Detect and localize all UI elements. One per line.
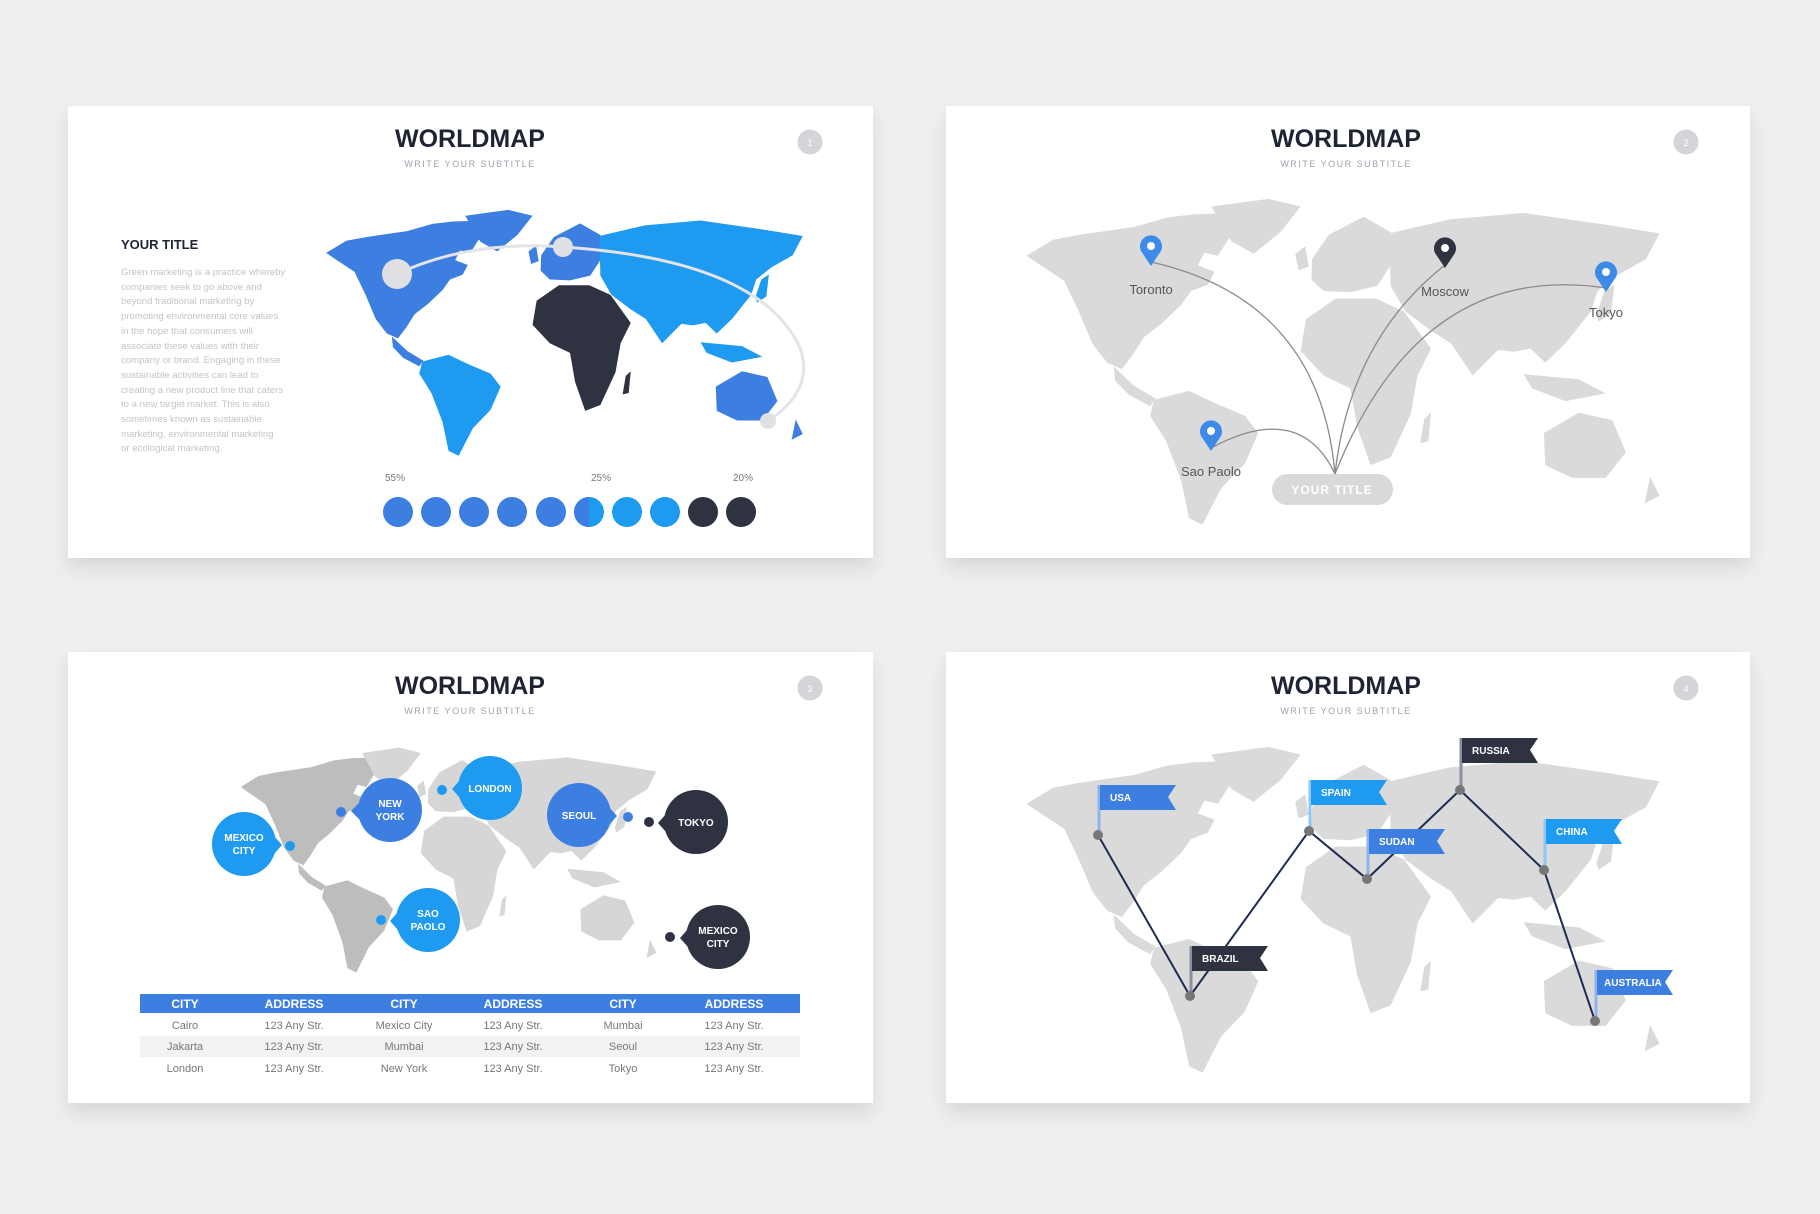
bubble: London: [437, 756, 522, 820]
map gray: [1026, 747, 1659, 1073]
route line: [1098, 790, 1595, 1021]
percentage labels: 55%: [385, 473, 405, 484]
badge 1: 1: [807, 138, 813, 148]
text block: your title: sustainable activities can lead to: [121, 370, 259, 381]
pill: your title: YOUR TITLE: [1291, 483, 1373, 497]
bubble: Mexico City dark: CITY: [707, 939, 730, 950]
flag: Spain: [1304, 780, 1387, 836]
bubble: New York: [336, 778, 422, 842]
bubble: New York: YORK: [376, 812, 405, 823]
table: CITY: [390, 997, 418, 1011]
pin: Moscow: Moscow: [1421, 284, 1469, 299]
badge 4: [1674, 676, 1698, 700]
arc connecting markers: [382, 237, 804, 429]
flag: Brazil: BRAZIL: [1202, 954, 1239, 965]
heading 3: [395, 672, 545, 716]
table: New York: [381, 1063, 428, 1075]
table: 123 Any Str.: [483, 1063, 543, 1075]
bubble: New York: NEW: [378, 799, 402, 810]
map: colored continents: [326, 210, 803, 456]
flag: China: CHINA: [1556, 827, 1588, 838]
text block: your title: marketing, environmental marketing: [121, 429, 274, 440]
text block: your title: in the hope that consumers will: [121, 326, 253, 337]
bubble: London: LONDON: [468, 784, 512, 795]
flags: [1093, 738, 1673, 1026]
bubble: Sao Paolo: SAO: [417, 909, 439, 920]
flag: USA: [1093, 785, 1176, 840]
flag: Brazil: [1185, 946, 1268, 1001]
panel 2: pins map: [946, 106, 1750, 558]
percentage labels: 25%: [591, 473, 611, 484]
bubble: Mexico City: [212, 812, 295, 876]
heading 2: WORLDMAP: [1271, 125, 1421, 153]
heading 4: WRITE YOUR SUBTITLE: [1280, 706, 1412, 716]
bubble: Mexico City dark: [665, 905, 750, 969]
bubble: Seoul: [547, 783, 633, 847]
badge 1: [798, 130, 822, 154]
table: CITY: [171, 997, 199, 1011]
table: 123 Any Str.: [264, 1063, 324, 1075]
heading 2: WRITE YOUR SUBTITLE: [1280, 159, 1412, 169]
badge 3: 3: [807, 684, 813, 694]
pin: Toronto: Toronto: [1129, 282, 1173, 297]
percentage labels: 20%: [733, 473, 753, 484]
map gray with darker americas: [241, 748, 656, 973]
table: 123 Any Str.: [704, 1063, 764, 1075]
table: ADDRESS: [705, 997, 763, 1011]
table: Mumbai: [603, 1020, 643, 1032]
text block: your title: promoting environmental core values: [121, 311, 279, 322]
bubble: Mexico City dark: MEXICO: [698, 926, 738, 937]
flag: Australia: AUSTRALIA: [1604, 978, 1662, 989]
table: CITY: [609, 997, 637, 1011]
badge 4: 4: [1683, 684, 1689, 694]
flag: Russia: [1455, 738, 1538, 795]
table: Jakarta: [167, 1041, 204, 1053]
flag: Spain: SPAIN: [1321, 788, 1351, 799]
badge 3: [798, 676, 822, 700]
text block: your title: companies seek to go above and: [121, 282, 262, 293]
heading 4: [1271, 672, 1421, 716]
connecting curves: [1151, 262, 1606, 474]
pin: Tokyo: [1589, 261, 1623, 320]
text block: your title: to a new target market. This is also: [121, 399, 270, 410]
panel 1: colored world map: [68, 106, 873, 558]
pin: Moscow: [1421, 237, 1469, 299]
table: London: [167, 1063, 203, 1075]
flag: Russia: RUSSIA: [1472, 746, 1510, 757]
bubble: Mexico City: MEXICO: [224, 833, 264, 844]
text block: your title: creating a new product line that caters: [121, 385, 283, 396]
flag: USA: USA: [1110, 793, 1131, 804]
heading 4: WORLDMAP: [1271, 672, 1421, 700]
text block: your title: or ecological marketing.: [121, 443, 222, 454]
heading 2: [1271, 125, 1421, 169]
pin: Toronto: [1129, 235, 1173, 297]
heading 3: WRITE YOUR SUBTITLE: [404, 706, 536, 716]
flag: China: [1539, 819, 1622, 875]
table: 123 Any Str.: [264, 1020, 324, 1032]
pin: Sao Paolo: [1181, 420, 1241, 479]
table: 123 Any Str.: [264, 1041, 324, 1053]
pin: Sao Paolo: Sao Paolo: [1181, 464, 1241, 479]
text block: your title: [121, 237, 285, 454]
text block: your title: company or brand. Engaging in these: [121, 355, 280, 366]
bubble: Tokyo: [644, 790, 728, 854]
table: Cairo: [172, 1020, 198, 1032]
badge 2: 2: [1683, 138, 1689, 148]
text block: your title: associate these values with their: [121, 341, 260, 352]
heading 1: WRITE YOUR SUBTITLE: [404, 159, 536, 169]
table: 123 Any Str.: [483, 1020, 543, 1032]
bubble: Mexico City: CITY: [233, 846, 256, 857]
heading 1: WORLDMAP: [395, 125, 545, 153]
bubble: Sao Paolo: PAOLO: [411, 922, 446, 933]
table: Mexico City: [376, 1020, 433, 1032]
bubble: Tokyo: TOKYO: [678, 818, 714, 829]
table: ADDRESS: [484, 997, 542, 1011]
table: Seoul: [609, 1041, 637, 1053]
panel 4: flags route: [946, 652, 1750, 1103]
panel 3: city bubbles and table: [68, 652, 873, 1103]
heading 1: [395, 125, 545, 169]
bubble: Seoul: SEOUL: [562, 811, 596, 822]
text block: your title: YOUR TITLE: [121, 237, 199, 252]
map gray: [1026, 199, 1659, 525]
bubbles: [212, 756, 750, 969]
table: 123 Any Str.: [704, 1020, 764, 1032]
flag: Sudan: SUDAN: [1379, 837, 1415, 848]
dot chart: [383, 497, 756, 527]
bubble: Sao Paolo: [376, 888, 460, 952]
table: ADDRESS: [265, 997, 323, 1011]
text block: your title: beyond traditional marketing by: [121, 296, 255, 307]
flag: Australia: [1590, 970, 1673, 1026]
table: Mumbai: [384, 1041, 424, 1053]
heading 3: WORLDMAP: [395, 672, 545, 700]
text block: your title: Green marketing is a practice whereby: [121, 267, 285, 278]
percentage labels: [385, 473, 753, 484]
pin: Tokyo: Tokyo: [1589, 305, 1623, 320]
table: 123 Any Str.: [483, 1041, 543, 1053]
flag: Sudan: [1362, 829, 1445, 884]
text block: your title: sometimes known as sustainable: [121, 414, 262, 425]
badge 2: [1674, 130, 1698, 154]
table: 123 Any Str.: [704, 1041, 764, 1053]
pill: your title: [1272, 474, 1393, 505]
table: [140, 994, 800, 1075]
table: Tokyo: [609, 1063, 637, 1075]
